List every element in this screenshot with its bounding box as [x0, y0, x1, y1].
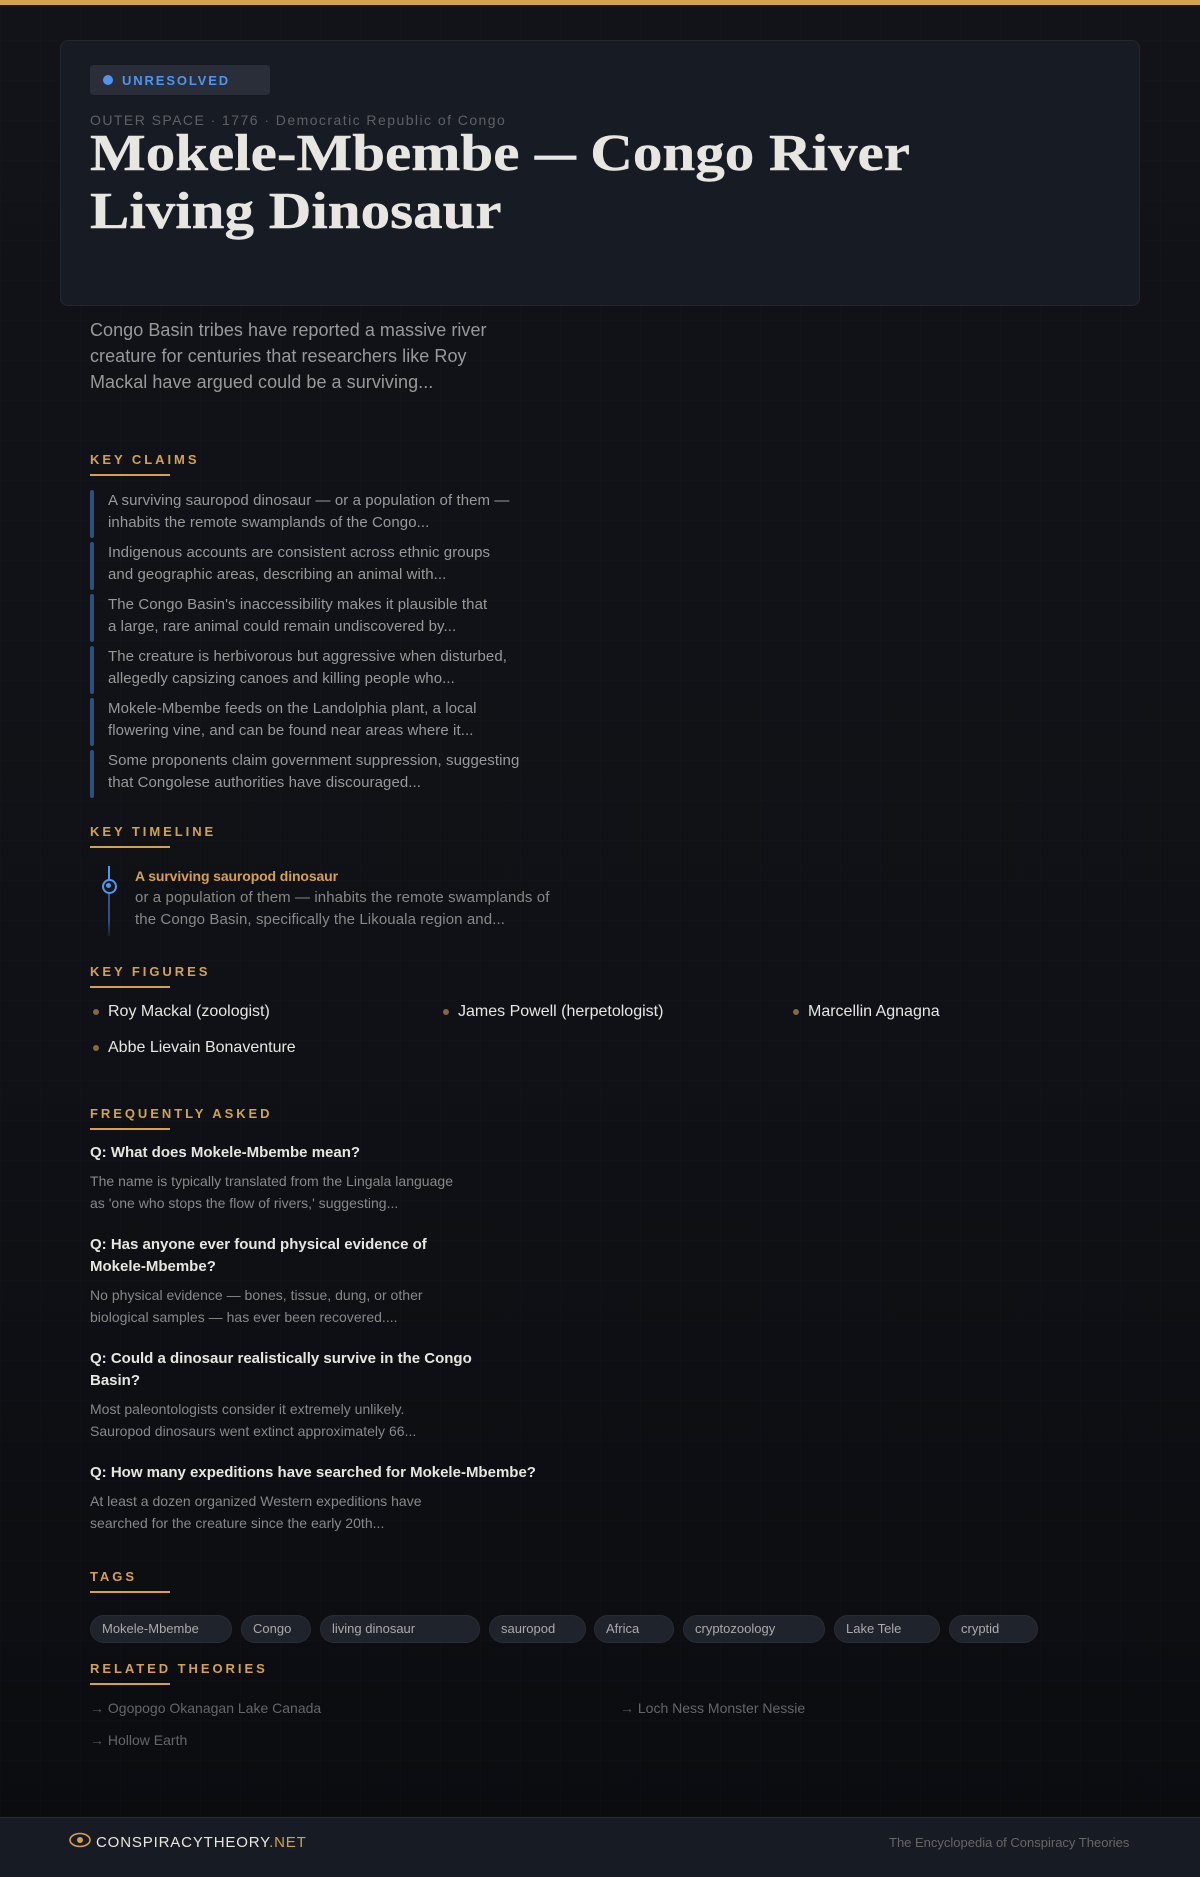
faq 4: At least a dozen organized Western expeditions have — [90, 1493, 422, 1509]
related link: Ogopogo: → Ogopogo Okanagan Lake Canada — [90, 1700, 321, 1716]
title: — — [534, 125, 575, 182]
claim 5: flowering vine, and can be found near areas where it... — [108, 722, 473, 739]
description: Mackal have argued could be a surviving... — [90, 372, 433, 392]
faq 1 — [90, 1144, 453, 1211]
claim 1 — [90, 490, 510, 538]
faq 4: searched for the creature since the early 20th... — [90, 1515, 384, 1531]
faq 3: Sauropod dinosaurs went extinct approximately 66... — [90, 1423, 416, 1439]
tag: cryptid — [961, 1621, 999, 1636]
title: Living Dinosaur — [90, 183, 502, 240]
timeline text: or a population of them — inhabits the remote swamplands of — [135, 889, 549, 906]
claim 1: A surviving sauropod dinosaur — or a population of them — — [108, 492, 509, 509]
faq 1: as 'one who stops the flow of rivers,' suggesting... — [90, 1195, 398, 1211]
figure: Abbe Lievain Bonaventure: Abbe Lievain Bonaventure — [108, 1039, 296, 1056]
tag — [320, 1615, 480, 1643]
tag: cryptozoology — [695, 1621, 775, 1636]
title — [90, 125, 910, 240]
meta line: OUTER SPACE · 1776 · Democratic Republic of Congo — [90, 112, 506, 128]
heading: key figures: KEY FIGURES — [90, 964, 210, 979]
tag: sauropod — [501, 1621, 555, 1636]
faq 2: biological samples — has ever been recovered.... — [90, 1309, 398, 1325]
faq 1: The name is typically translated from the Lingala language — [90, 1173, 453, 1189]
related link: Hollow Earth: → Hollow Earth — [90, 1732, 187, 1748]
tag: living dinosaur — [332, 1621, 415, 1636]
heading: key timeline: KEY TIMELINE — [90, 824, 216, 839]
timeline line — [108, 866, 110, 936]
status badge — [90, 65, 270, 95]
figure: James Powell: James Powell (herpetologist) — [458, 1003, 663, 1020]
timeline title: A surviving sauropod dinosaur — [135, 868, 338, 884]
claim 5 — [90, 698, 477, 746]
faq 3 — [90, 1350, 472, 1439]
description — [90, 320, 487, 392]
description: creature for centuries that researchers like Roy — [90, 346, 467, 366]
heading: frequently asked: FREQUENTLY ASKED — [90, 1106, 273, 1121]
faq 2: Q: Has anyone ever found physical evidence of — [90, 1236, 427, 1253]
heading: tags: TAGS — [90, 1569, 137, 1584]
claim 4: allegedly capsizing canoes and killing people who... — [108, 670, 455, 687]
faq 1: Q: What does Mokele-Mbembe mean? — [90, 1144, 360, 1161]
faq 4 — [90, 1464, 536, 1531]
claim 2: Indigenous accounts are consistent across ethnic groups — [108, 544, 490, 561]
icon: eye logo — [69, 1832, 91, 1848]
tag: Mokele-Mbembe — [102, 1621, 199, 1636]
faq 3: Most paleontologists consider it extremely unlikely. — [90, 1401, 404, 1417]
tag: Africa — [606, 1621, 639, 1636]
tag — [489, 1615, 586, 1643]
footer — [0, 1817, 1200, 1877]
tag list — [90, 1615, 1038, 1643]
claim 4 — [90, 646, 507, 694]
faq 4: Q: How many expeditions have searched for Mokele-Mbembe? — [90, 1464, 536, 1481]
heading: key claims: KEY CLAIMS — [90, 452, 199, 467]
figure: Roy Mackal: Roy Mackal (zoologist) — [108, 1003, 270, 1020]
tag — [90, 1615, 232, 1643]
tag: Lake Tele — [846, 1621, 901, 1636]
footer logo text: CONSPIRACYTHEORY.NET — [96, 1834, 307, 1851]
tag — [241, 1615, 311, 1643]
faq 3: Q: Could a dinosaur realistically survive in the Congo — [90, 1350, 472, 1367]
claim 6: that Congolese authorities have discouraged... — [108, 774, 421, 791]
claim 2: and geographic areas, describing an animal with... — [108, 566, 446, 583]
top accent bar — [0, 0, 1200, 5]
claim 6 — [90, 750, 519, 798]
tag — [683, 1615, 825, 1643]
badge label: UNRESOLVED — [122, 73, 230, 88]
claim 1: inhabits the remote swamplands of the Congo... — [108, 514, 429, 531]
related link: Loch Ness: → Loch Ness Monster Nessie — [620, 1700, 805, 1716]
claim 5: Mokele-Mbembe feeds on the Landolphia plant, a local — [108, 700, 477, 717]
claim 2 — [90, 542, 490, 590]
icon: status dot — [103, 75, 113, 85]
tag — [949, 1615, 1038, 1643]
claim 3 — [90, 594, 488, 642]
heading: related theories: RELATED THEORIES — [90, 1661, 268, 1676]
timeline entry — [102, 866, 550, 936]
tag — [834, 1615, 940, 1643]
footer tagline: The Encyclopedia of Conspiracy Theories — [889, 1835, 1129, 1850]
claim 4: The creature is herbivorous but aggressive when disturbed, — [108, 648, 507, 665]
title: Mokele-Mbembe Congo River — [90, 125, 910, 182]
tag — [594, 1615, 674, 1643]
claim 6: Some proponents claim government suppression, suggesting — [108, 752, 519, 769]
claim 3: The Congo Basin's inaccessibility makes it plausible that — [108, 596, 487, 613]
faq 2: No physical evidence — bones, tissue, dung, or other — [90, 1287, 423, 1303]
figure: Marcellin Agnagna: Marcellin Agnagna — [808, 1003, 940, 1020]
timeline text — [135, 889, 550, 928]
tag: Congo — [253, 1621, 291, 1636]
panel: header card — [60, 40, 1140, 306]
icon: timeline node — [102, 878, 116, 894]
claim 3: a large, rare animal could remain undiscovered by... — [108, 618, 456, 635]
description: Congo Basin tribes have reported a massive river — [90, 320, 487, 340]
faq 2 — [90, 1236, 427, 1325]
faq 2: Mokele-Mbembe? — [90, 1258, 216, 1275]
faq 3: Basin? — [90, 1372, 140, 1389]
timeline text: the Congo Basin, specifically the Likouala region and... — [135, 911, 505, 928]
